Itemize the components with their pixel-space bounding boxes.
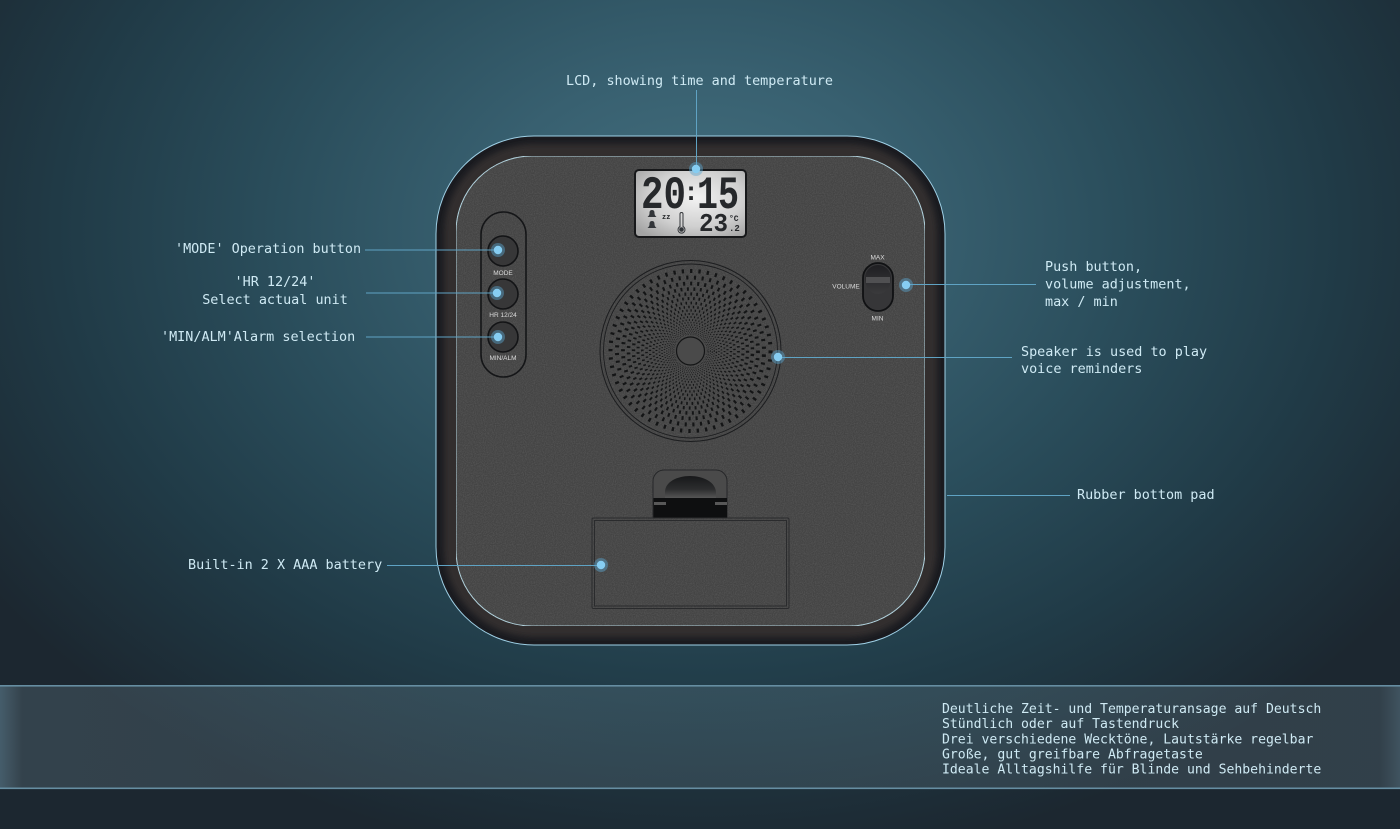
latch recess (665, 476, 716, 498)
MAX label: MAX (870, 254, 885, 262)
callout: MIN/ALM: 'MIN/ALM'Alarm selection (161, 330, 355, 345)
LCD time: 20 (641, 170, 686, 222)
MODE label: MODE (493, 270, 513, 277)
callout: speaker: voice reminders (1021, 362, 1142, 377)
switch ridge (866, 277, 890, 283)
MIN/ALM button (488, 322, 518, 352)
callout: HR 12/24: 'HR 12/24' (235, 275, 315, 290)
LCD display (635, 170, 746, 239)
LCD unit and decimal (729, 215, 740, 234)
LCD time: : (683, 178, 699, 208)
callout: volume: max / min (1045, 295, 1118, 310)
battery door (592, 518, 789, 608)
LCD unit and decimal: °C (729, 215, 739, 224)
latch highlights (654, 502, 727, 505)
MODE button (488, 236, 518, 266)
rear panel (456, 156, 925, 626)
HR 12/24 button (488, 279, 518, 309)
LCD thermometer (678, 212, 685, 233)
LCD unit and decimal: .2 (729, 224, 740, 234)
MIN/ALM label: MIN/ALM (489, 355, 517, 362)
feature list text: Drei verschiedene Wecktöne, Lautstärke regelbar (942, 732, 1313, 748)
bottom strip panel (0, 685, 1400, 789)
callout: speaker (771, 345, 1207, 377)
LCD time: 15 (697, 170, 739, 222)
MIN label: MIN (872, 316, 884, 322)
callout: battery (188, 558, 608, 573)
latch base (654, 498, 727, 518)
feature list text: Deutliche Zeit- und Temperaturansage auf Deutsch (942, 702, 1321, 717)
LCD time (641, 170, 739, 222)
feature list text: Ideale Alltagshilfe für Blinde und Sehbehinderte (942, 762, 1321, 778)
button pill (481, 212, 526, 377)
volume slide switch (832, 254, 893, 322)
callout: volume: Push button, (1045, 260, 1142, 275)
LCD temperature: 23 (699, 209, 728, 239)
callout: MODE (175, 242, 505, 257)
feature list text: Stündlich oder auf Tastendruck (942, 717, 1179, 732)
callout: MIN/ALM (161, 330, 505, 345)
rubber rim (436, 136, 945, 645)
callout: battery: Built-in 2 X AAA battery (188, 558, 382, 573)
callout: rubber pad: Rubber bottom pad (1077, 488, 1215, 503)
LCD alarm bells (648, 210, 656, 228)
feature list text (942, 702, 1321, 778)
speaker grille (600, 260, 781, 442)
callout: MODE: 'MODE' Operation button (175, 242, 361, 257)
device: clock rear view (436, 136, 945, 645)
callout: LCD (566, 74, 833, 176)
callout: HR 12/24: Select actual unit (202, 293, 348, 308)
callout: LCD: LCD, showing time and temperature (566, 74, 833, 89)
feature list text: Große, gut greifbare Abfragetaste (942, 748, 1203, 762)
battery latch (653, 470, 727, 518)
VOLUME label: VOLUME (832, 284, 860, 290)
LCD snooze mark: zz (662, 214, 670, 222)
callout: volume (899, 260, 1191, 310)
switch knob (865, 265, 891, 294)
HR 12/24 label: HR 12/24 (489, 312, 517, 319)
callout: volume: volume adjustment, (1045, 278, 1191, 292)
callout: speaker: Speaker is used to play (1021, 345, 1207, 360)
callout: HR 12/24 (202, 275, 504, 308)
